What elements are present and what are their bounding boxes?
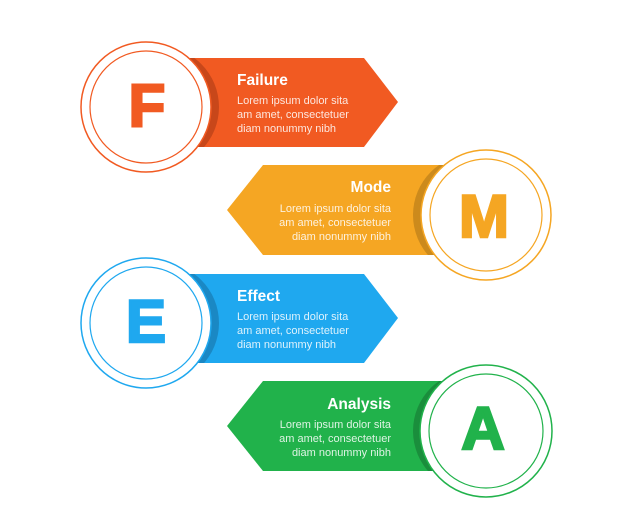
text: Analysis — [279, 396, 392, 459]
icon: circle E: E — [126, 288, 166, 355]
text: Failure: diam nonummy nibh — [237, 123, 336, 135]
row 1: Failure — [81, 42, 398, 172]
text: Analysis: diam nonummy nibh — [292, 447, 391, 459]
row 3: Effect — [81, 258, 398, 388]
icon: circle E — [81, 258, 211, 388]
text: Failure: Lorem ipsum dolor sita — [237, 95, 349, 107]
icon: circle F — [81, 42, 211, 172]
arrow: Analysis — [227, 381, 440, 471]
arrow: Failure — [180, 58, 398, 147]
text: Analysis: Lorem ipsum dolor sita — [280, 419, 392, 431]
text: Effect: Lorem ipsum dolor sita — [237, 311, 349, 323]
text: Effect: diam nonummy nibh — [237, 339, 336, 351]
icon: circle M — [421, 150, 551, 280]
text: Effect — [237, 288, 349, 351]
icon: circle F: F — [129, 72, 165, 139]
row 4: Analysis — [227, 365, 552, 497]
icon: circle A — [420, 365, 552, 497]
arrow: Effect — [180, 274, 398, 363]
icon: circle A: A — [461, 395, 505, 462]
text: Failure: Failure — [237, 72, 288, 89]
text: Failure — [237, 72, 349, 135]
text: Mode: Mode — [351, 179, 391, 196]
icon: circle M: M — [459, 183, 509, 250]
text: Effect: Effect — [237, 288, 280, 305]
text: Mode: am amet, consectetuer — [279, 217, 391, 229]
text: Mode: Lorem ipsum dolor sita — [280, 203, 392, 215]
text: Effect: am amet, consectetuer — [237, 325, 349, 337]
text: Mode: diam nonummy nibh — [292, 231, 391, 243]
text: Analysis: am amet, consectetuer — [279, 433, 391, 445]
text: Failure: am amet, consectetuer — [237, 109, 349, 121]
arrow: Mode — [227, 165, 440, 255]
text: Analysis: Analysis — [327, 396, 391, 413]
row 2: Mode — [227, 150, 551, 280]
text: Mode — [279, 179, 392, 243]
